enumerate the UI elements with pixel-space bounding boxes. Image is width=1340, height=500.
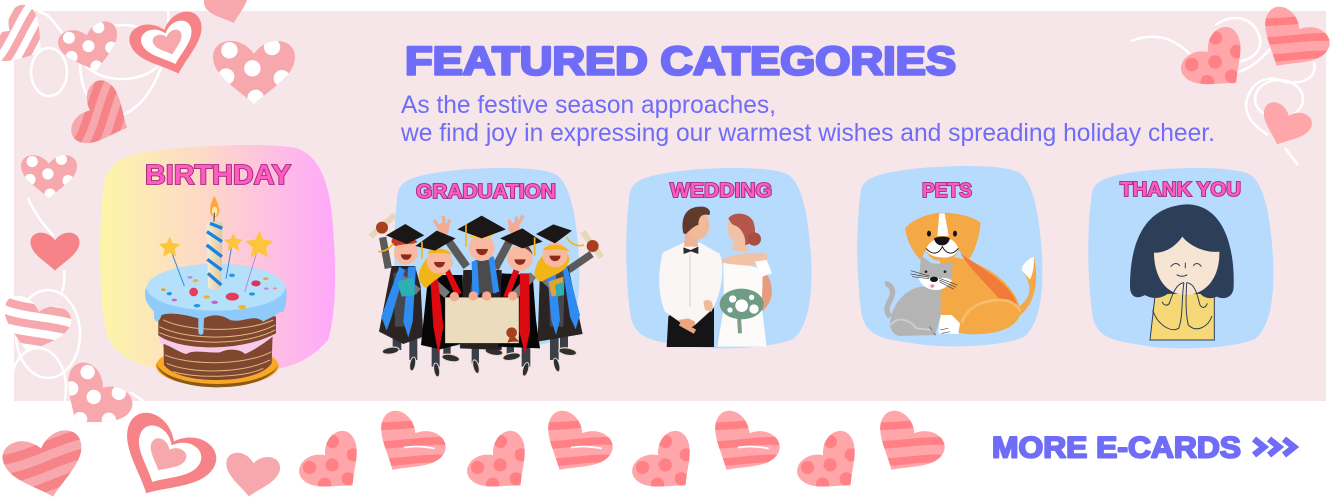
illustration: graduates [371, 215, 602, 377]
pets label: PETS [922, 180, 972, 202]
heart: solid right [1254, 99, 1315, 154]
bouquet [733, 317, 746, 333]
panel: pets card [857, 166, 1042, 346]
illustration: dog and cat [885, 213, 1036, 336]
heart: bottom striped 3 [675, 379, 809, 500]
heart: bottom solid [222, 451, 281, 500]
heart: bottom polka 1 [293, 424, 377, 500]
heart: pink striped [64, 70, 144, 164]
heart: white striped left [0, 291, 81, 364]
subtitle text: we find joy in expressing our warmest wishes and spreading holiday cheer. [400, 119, 1215, 147]
heart: striped top left [0, 0, 63, 83]
heart: polka lower left [46, 355, 139, 446]
illustration: thankful girl [1130, 204, 1234, 340]
diploma [445, 297, 519, 343]
heart: bottom striped 4 [840, 379, 974, 500]
birthday label: BIRTHDAY [145, 159, 291, 190]
wedding label: WEDDING [670, 180, 772, 202]
more e-cards link: MORE E-CARDS [992, 432, 1241, 464]
panel: graduation card [371, 168, 602, 377]
panel: pink background [14, 11, 1326, 401]
heart: bottom striped large [0, 425, 100, 500]
caps [386, 216, 572, 251]
stoles [381, 257, 580, 337]
heart: bottom polka 2 [461, 424, 545, 500]
decorative white curls, top left [10, 10, 168, 428]
decorative white curls, top right [1131, 18, 1315, 165]
panel: birthday card [100, 145, 335, 387]
books [397, 277, 415, 297]
heart: bottom concentric [104, 406, 223, 500]
heart: bottom polka 3 [626, 424, 710, 500]
cat [885, 284, 893, 317]
illustration: bride and groom [659, 207, 772, 347]
graduation label: GRADUATION [416, 181, 556, 203]
gowns [379, 266, 423, 344]
heart: large polka [213, 39, 295, 106]
suits [393, 267, 413, 327]
heart: solid left [30, 233, 80, 271]
subtitle text [400, 91, 1215, 147]
subtitle text: As the festive season approaches, [401, 91, 776, 119]
heads [394, 235, 568, 274]
panel: thank you card [1088, 168, 1273, 348]
icon: birthday cake [145, 196, 287, 387]
icon: chevron arrows [1254, 439, 1294, 455]
arm link [703, 300, 713, 312]
panel: wedding card [626, 168, 811, 348]
bride [722, 253, 767, 267]
title: FEATURED CATEGORIES [405, 40, 956, 84]
heart: solid top [202, 0, 255, 30]
thank you label: THANK YOU [1120, 179, 1241, 201]
raised arms [383, 237, 388, 268]
heart: bottom striped 2 [508, 379, 642, 500]
tassels [378, 224, 584, 259]
heart: polka top right [1174, 20, 1261, 106]
heart: bottom striped 1 [341, 379, 475, 500]
heart: polka top left [55, 17, 126, 80]
heart: concentric top [126, 8, 214, 85]
heart: striped top right [1225, 0, 1340, 102]
legs and shoes [393, 330, 568, 367]
heart: bottom polka 4 [791, 424, 875, 500]
hair behind [419, 251, 453, 288]
hair [392, 236, 417, 246]
heart: polka left [21, 154, 77, 200]
scrolls [371, 215, 395, 237]
